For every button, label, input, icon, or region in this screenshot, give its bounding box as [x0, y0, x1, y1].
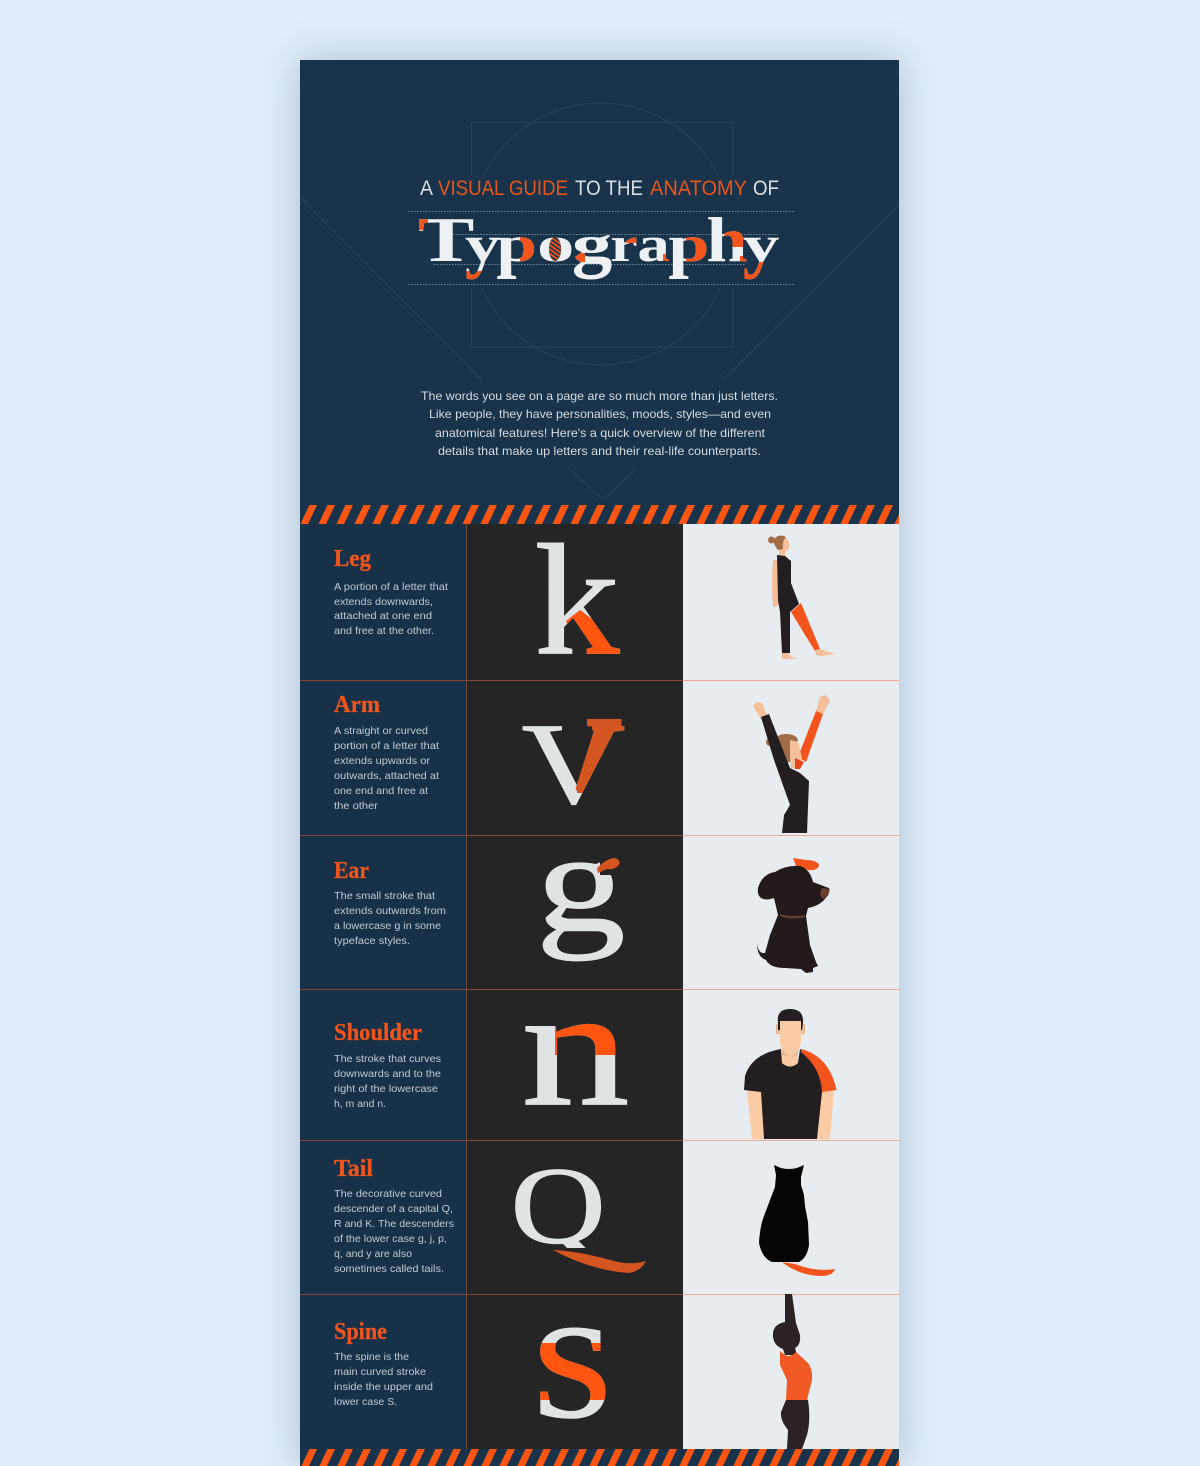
figure: woman with orange back	[773, 1294, 812, 1449]
heading: Tail: Tail	[334, 1156, 373, 1182]
intro text: details that make up letters and their real-life counterparts.	[438, 444, 761, 458]
bottom stripe band	[300, 1449, 899, 1466]
description: Spine: lower case S.	[334, 1396, 397, 1408]
description: Leg: A portion of a letter that	[334, 581, 448, 593]
title: Typography: T	[418, 205, 474, 276]
description: Tail: q, and y are also	[334, 1248, 412, 1260]
subtitle	[420, 177, 779, 200]
description: Spine: The spine is the	[334, 1351, 409, 1363]
description: Arm: one end and free at	[334, 785, 428, 797]
letter: k	[537, 542, 620, 654]
description: Arm: A straight or curved	[334, 725, 428, 737]
letter: n	[525, 1024, 628, 1105]
title: Typography: p	[496, 186, 537, 280]
heading: Arm: Arm	[334, 692, 380, 718]
description: Tail: The decorative curved	[334, 1188, 442, 1200]
letter: V: V	[522, 700, 625, 829]
panel: Leg	[334, 513, 835, 688]
title: Typography: T	[418, 205, 474, 276]
title: Typography: y	[465, 217, 501, 272]
description: Shoulder: The stroke that curves	[334, 1053, 441, 1065]
letter: Q: Q	[510, 1146, 606, 1267]
description: Leg: and free at the other.	[334, 625, 434, 637]
description: Leg	[334, 581, 448, 637]
heading: Leg: Leg	[334, 546, 371, 572]
title: Typography: g	[572, 185, 612, 279]
title: Typography: y	[743, 216, 779, 272]
description: Shoulder: right of the lowercase	[334, 1083, 438, 1095]
description: Ear: a lowercase g in some	[334, 920, 441, 932]
description: Arm: outwards, attached at	[334, 770, 439, 782]
title: Typography: h	[706, 204, 748, 275]
heading: Ear: Ear	[334, 858, 369, 884]
figure: man with orange shoulder	[744, 1009, 836, 1139]
subtitle: VISUAL GUIDE	[438, 177, 568, 200]
description: Tail: descender of a capital Q,	[334, 1203, 453, 1215]
description: Tail: R and K. The descenders	[334, 1218, 454, 1230]
intro text	[421, 389, 778, 458]
subtitle: ANATOMY	[650, 177, 747, 200]
top stripe band	[300, 505, 899, 524]
panel: Arm	[334, 692, 830, 833]
letter: V: V	[522, 700, 625, 829]
intro text: anatomical features! Here's a quick overview of the different	[435, 426, 766, 440]
letter: k: k	[535, 513, 619, 688]
letter: S: S	[532, 1300, 613, 1446]
description: Spine	[334, 1351, 433, 1408]
letter: S: S	[532, 1300, 613, 1446]
title: Typography: y	[465, 185, 500, 279]
panel: Shoulder	[334, 954, 836, 1141]
title: Typography: r	[610, 217, 638, 273]
panel: Spine	[334, 1294, 812, 1449]
header panel	[300, 60, 899, 524]
title: Typography: p	[668, 186, 710, 280]
description: Spine: inside the upper and	[334, 1381, 433, 1393]
panel: Ear	[334, 858, 830, 973]
description: Spine: main curved stroke	[334, 1366, 426, 1378]
figure: woman with extended leg	[768, 536, 835, 659]
title: Typography: p	[668, 217, 710, 272]
description: Arm	[334, 725, 439, 812]
letter: n: n	[522, 954, 629, 1141]
title: Typography: y	[465, 185, 500, 279]
description: Ear: extends outwards from	[334, 905, 446, 917]
guide lines	[408, 212, 794, 284]
description: Shoulder: h, m and n.	[334, 1098, 386, 1110]
letter: g: g	[536, 803, 625, 961]
figure: cat with orange tail	[759, 1165, 835, 1276]
subtitle: A	[420, 177, 433, 200]
title: Typography	[419, 217, 779, 280]
description: Ear: The small stroke that	[334, 890, 435, 902]
title: Typography: o	[537, 217, 574, 272]
intro text: Like people, they have personalities, moods, styles—and even	[429, 407, 771, 421]
description: Arm: the other	[334, 800, 379, 812]
subtitle: TO THE	[575, 177, 643, 200]
title: Typography: p	[668, 217, 710, 272]
letter: S	[540, 1328, 606, 1419]
letter: V	[522, 719, 624, 806]
description: Ear	[334, 890, 446, 947]
description: Shoulder	[334, 1053, 441, 1110]
description: Leg: extends downwards,	[334, 596, 433, 608]
title: Typography: a	[637, 216, 670, 272]
title: Typography: p	[496, 216, 537, 272]
figure: woman raising arms	[753, 695, 830, 833]
description: Ear: typeface styles.	[334, 935, 410, 947]
title: Typography: h	[706, 204, 748, 275]
subtitle: OF	[753, 177, 779, 200]
construction lines	[300, 103, 899, 500]
title: Typography: p	[496, 216, 537, 272]
description: Leg: attached at one end	[334, 610, 432, 622]
letter: n: n	[522, 954, 629, 1141]
description: Tail: sometimes called tails.	[334, 1263, 444, 1275]
description: Shoulder: downwards and to the	[334, 1068, 441, 1080]
title: Typography: g	[572, 216, 612, 272]
title: Typography: y	[743, 186, 779, 280]
description: Tail	[334, 1188, 454, 1275]
heading: Spine: Spine	[334, 1319, 387, 1345]
figure: dog with orange ear	[757, 858, 830, 973]
letter: g	[542, 858, 623, 962]
title: Typography: a	[637, 216, 670, 272]
letter: k: k	[535, 513, 619, 688]
row divider lines	[300, 524, 899, 1450]
letter: Q	[515, 1169, 646, 1273]
heading: Shoulder: Shoulder	[334, 1020, 422, 1046]
panel: Tail	[334, 1146, 835, 1276]
description: Arm: extends upwards or	[334, 755, 431, 767]
description: Arm: portion of a letter that	[334, 740, 439, 752]
title: Typography: r	[610, 217, 638, 273]
description: Tail: of the lower case g, j, p,	[334, 1233, 447, 1245]
intro text: The words you see on a page are so much more than just letters.	[421, 389, 778, 403]
panel: column backgrounds	[300, 524, 899, 1450]
title: Typography: y	[743, 186, 779, 280]
title: Typography: g	[572, 216, 612, 272]
